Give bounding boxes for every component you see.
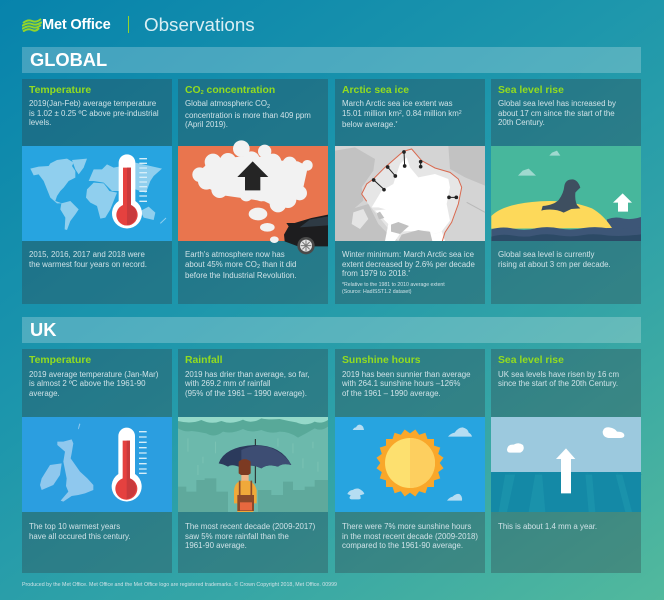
- text: UK temperature summary: is almost 2 ºC above the 1961-90: [29, 379, 146, 388]
- text: warmest years: the warmest four years on record.: [29, 260, 147, 269]
- text: temperature summary: 2019(Jan-Feb) average temperature: [29, 99, 156, 108]
- text: UK temperature summary: [29, 370, 158, 398]
- text: current rate: Global sea level is currently: [498, 250, 594, 259]
- text: rainfall summary: (95% of the 1961 – 1990 average).: [185, 389, 307, 398]
- text: recent decade rainfall: saw 5% more rainfall than the: [185, 532, 289, 541]
- heading: sunshine hours: Sunshine hours: [342, 355, 421, 366]
- text: rainfall summary: with 269.2 mm of rainfall: [185, 379, 271, 388]
- heading: CO2 concentration: CO2 concentration: [185, 84, 275, 96]
- illustration: Arctic ice map: [335, 146, 486, 242]
- text: CO2 increase: [185, 250, 296, 280]
- text: CO2 increase: before the Industrial Revolution.: [185, 271, 296, 280]
- text: recent decade sunshine: in the most recent decade (2009-2018): [342, 532, 478, 541]
- heading: sea level rise: Sea level rise: [498, 84, 564, 96]
- text: Arctic summary: 15.01 million km2, 0.84 million km2: [342, 109, 462, 118]
- text: sea level summary: 20th Century.: [498, 118, 545, 127]
- footnote: [342, 282, 445, 294]
- heading: rainfall: Rainfall: [185, 355, 223, 366]
- illustration: seal on sandbank: [491, 146, 641, 241]
- text: UK temperature summary: 2019 average temperature (Jan-Mar): [29, 370, 158, 378]
- panel: UK sea level rise: [491, 349, 641, 573]
- text: CO2 summary: (April 2019).: [185, 120, 228, 129]
- text: recent decade sunshine: [342, 522, 478, 550]
- text: sea level summary: Global sea level has increased by: [498, 99, 616, 108]
- panel: CO2 concentration: [178, 79, 328, 304]
- text: rainfall summary: [185, 370, 310, 398]
- panel: rainfall: [178, 349, 328, 573]
- text: UK sea level summary: UK sea levels have risen by 16 cm: [498, 370, 619, 378]
- illustration: thought cloud and car: [178, 140, 328, 254]
- heading: temperature: Temperature: [29, 355, 91, 366]
- text: warmest years: 2015, 2016, 2017 and 2018 were: [29, 250, 145, 259]
- text: CO2 summary: [185, 99, 311, 129]
- header logo: Met Office: Met Office: [42, 17, 111, 33]
- text: warmest years: [29, 250, 147, 269]
- panel: Arctic sea ice: [335, 79, 485, 304]
- text: CO2 increase: about 45% more CO2 than it did: [185, 260, 296, 270]
- section heading: UK: [22, 316, 641, 342]
- text: CO2 summary: Global atmospheric CO2: [185, 99, 270, 110]
- text: CO2 summary: concentration is more than 409 ppm: [185, 111, 311, 120]
- text: winter minimum: from 1979 to 2018.*: [342, 269, 410, 278]
- text: sunshine summary: with 264.1 sunshine hours –126%: [342, 379, 460, 388]
- car: [284, 215, 328, 246]
- text: current rate: rising at about 3 cm per decade.: [498, 260, 611, 269]
- text: Arctic summary: March Arctic sea ice extent was: [342, 99, 453, 108]
- section heading: Global: GLOBAL: [30, 49, 107, 70]
- text: sea level summary: about 17 cm since the start of the: [498, 109, 615, 118]
- text: Arctic summary: [342, 99, 462, 129]
- text: warmest years UK: have all occured this century.: [29, 532, 131, 541]
- panel: global sea level rise: [491, 79, 641, 304]
- illustration: world map and thermometer: [22, 146, 172, 241]
- section heading: UK: UK: [30, 318, 56, 340]
- text: recent decade sunshine: compared to the 1961-90 average.: [342, 541, 463, 550]
- text: winter minimum: extent decreased by 2.6% per decade: [342, 260, 475, 269]
- heading: Arctic sea ice: Arctic sea ice: [342, 84, 409, 96]
- text: temperature summary: is 1.02 ± 0.25 ºC above pre-industrial: [29, 109, 159, 118]
- illustration: rising sea with arrow: [491, 417, 642, 512]
- text: sunshine summary: [342, 370, 471, 398]
- illustration: UK map and thermometer: [22, 417, 172, 512]
- text: current rate: [498, 250, 611, 269]
- cloud: [192, 140, 313, 243]
- section heading: Global: [22, 47, 641, 73]
- header divider: [128, 16, 129, 33]
- heading: sea level rise: Sea level rise: [498, 355, 564, 366]
- text: temperature summary: [29, 99, 159, 127]
- text: warmest years UK: [29, 522, 131, 541]
- text: recent decade rainfall: 1961-90 average.: [185, 541, 247, 550]
- header title: Observations: Observations: [144, 14, 255, 35]
- text: sunshine summary: 2019 has been sunnier than average: [342, 370, 471, 378]
- text: rainfall summary: 2019 has drier than average, so far,: [185, 370, 310, 378]
- text: warmest years UK: The top 10 warmest years: [29, 522, 120, 531]
- footer credit: Produced by the Met Office. Met Office and the Met Office logo are registered trademarks. © Crown Copyright 2018, Met Office. 00999: [22, 582, 337, 588]
- text: winter minimum: [342, 250, 475, 278]
- text: Arctic summary: below average.*: [342, 120, 397, 129]
- text: recent decade rainfall: The most recent decade (2009-2017): [185, 522, 315, 531]
- panel: sunshine hours: [335, 349, 485, 573]
- text: sunshine summary: of the 1961 – 1990 average.: [342, 389, 441, 398]
- text: UK temperature summary: average.: [29, 389, 60, 398]
- panel: UK temperature: [22, 349, 172, 573]
- text: CO2 increase: Earth's atmosphere now has: [185, 250, 285, 259]
- footnote: *Relative to the 1981 to 2010 average extent: [342, 282, 445, 288]
- text: recent decade rainfall: [185, 522, 315, 550]
- text: temperature summary: levels.: [29, 118, 51, 127]
- illustration: sun and clouds: [335, 417, 485, 512]
- text: recent decade sunshine: There were 7% more sunshine hours: [342, 522, 471, 531]
- text: annual rate: This is about 1.4 mm a year.: [498, 522, 597, 531]
- text: winter minimum: Winter minimum: March Arctic sea ice: [342, 250, 474, 259]
- illustration: person with umbrella in rain: [178, 417, 328, 512]
- heading: temperature: Temperature: [29, 84, 91, 96]
- panel: global temperature: [22, 79, 172, 304]
- text: sea level summary: [498, 99, 616, 127]
- footnote: (Source: HadISST1.2 dataset): [342, 288, 412, 294]
- text: UK sea level summary: since the start of the 20th Century.: [498, 379, 618, 388]
- text: UK sea level summary: [498, 370, 619, 388]
